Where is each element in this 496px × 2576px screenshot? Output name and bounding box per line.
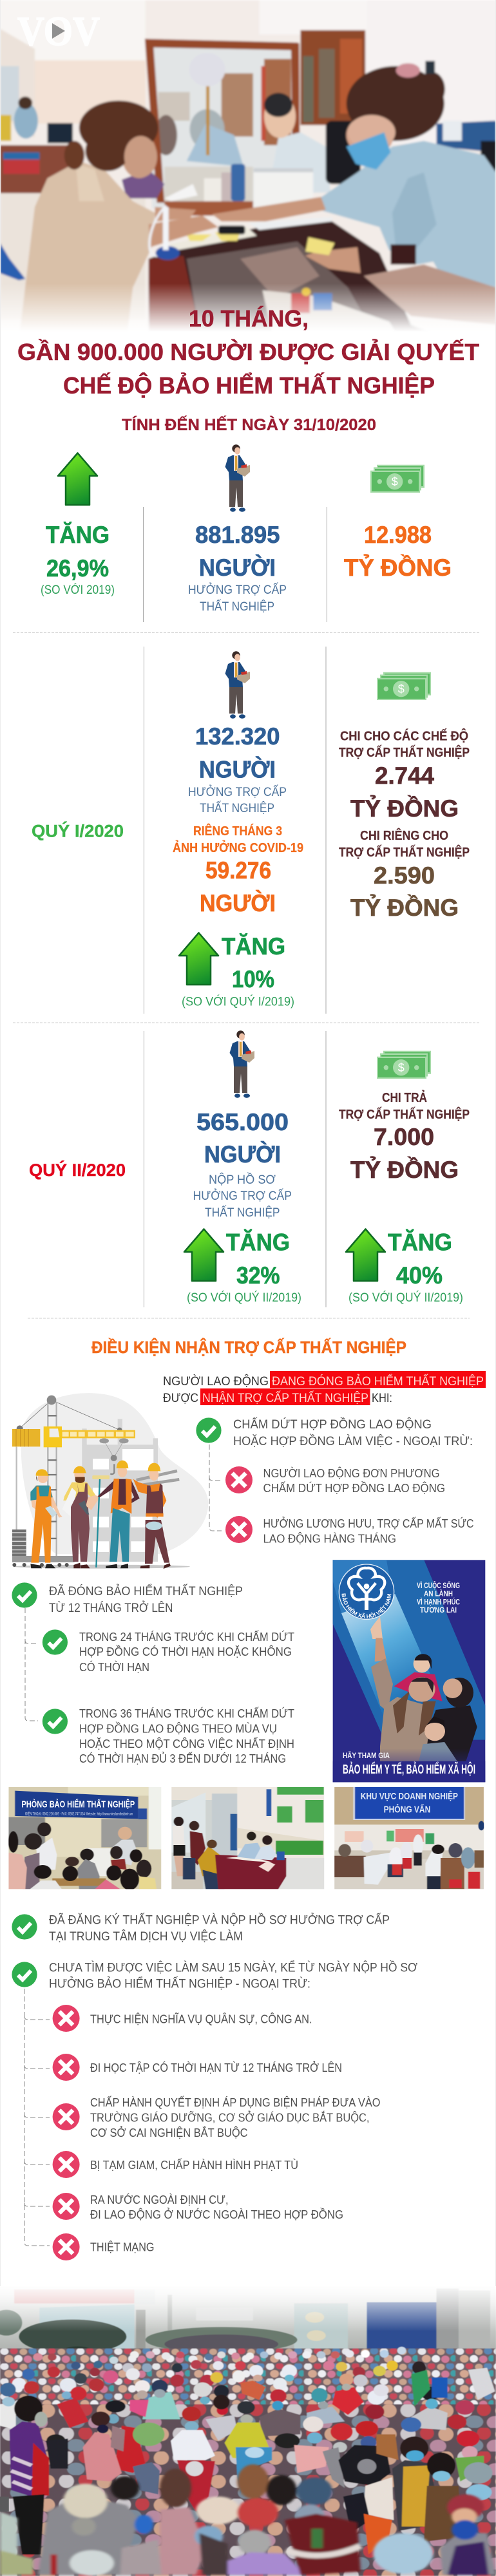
sub condition: 24 months: TRONG 24 THÁNG TRƯỚC KHI CHẤM DỨT xyxy=(79,1630,294,1643)
stat: increase 40 percent: (SO VỚI QUÝ II/2019) xyxy=(348,1290,463,1305)
poster slogan text: AN LÀNH xyxy=(424,1588,453,1598)
photo row: employment service centres xyxy=(8,1787,484,1890)
stat: increase 26.9 percent: 26,9% xyxy=(46,555,109,582)
crowd base texture xyxy=(0,2349,496,2407)
stat: March COVID-19 59.276 people: ẢNH HƯỞNG COVID-19 xyxy=(173,840,303,855)
condition: registered unemployment: ĐÃ ĐĂNG KÝ THẤT NGHIỆP VÀ NỘP HỒ SƠ HƯỞNG TRỢ CẤP xyxy=(49,1911,390,1927)
stat: increase 32 percent: 32% xyxy=(236,1262,280,1289)
exception: reform school or rehab xyxy=(53,2096,380,2139)
stat: 7.000 billion VND xyxy=(339,1090,470,1183)
condition: no job after 15 days xyxy=(12,1959,417,1991)
pen on string xyxy=(149,205,173,256)
far riders xyxy=(33,2347,426,2377)
exception: emigration: ĐI LAO ĐỘNG Ở NƯỚC NGOÀI THEO HỢP ĐỒNG xyxy=(90,2208,343,2221)
connector: exceptions list xyxy=(24,1989,50,2246)
icon: up arrow xyxy=(346,1229,385,1281)
stat: 2.744 billion VND: TRỢ CẤP THẤT NGHIỆP xyxy=(339,744,470,760)
sub condition: 36 months: HỢP ĐỒNG LAO ĐỘNG THEO MÙA VỤ xyxy=(79,1722,277,1735)
stat: increase 26.9 percent xyxy=(41,522,115,597)
exception: unilateral termination: CHẤM DỨT HỢP ĐỒNG LAO ĐỘNG xyxy=(263,1481,445,1495)
poster slogan text: HÃY THAM GIA xyxy=(343,1750,390,1760)
stat: increase 32 percent: TĂNG xyxy=(226,1229,290,1256)
exception: unilateral termination xyxy=(225,1466,445,1495)
label: quarter II: QUÝ II/2020 xyxy=(29,1160,126,1180)
stat: 565.000 people xyxy=(193,1109,292,1220)
exception: reform school or rehab: CHẤP HÀNH QUYẾT ĐỊNH ÁP DỤNG BIỆN PHÁP ĐƯA VÀO xyxy=(90,2096,380,2109)
condition: no job after 15 days: HƯỞNG BẢO HIỂM THẤT NGHIỆP - NGOẠI TRỪ: xyxy=(49,1976,310,1991)
poster: social insurance: BẢO HIỂM XÃ HỘI VIỆT NAM xyxy=(341,1593,392,1618)
exception: detention xyxy=(53,2151,298,2178)
exception: detention: BỊ TẠM GIAM, CHẤP HÀNH HÌNH PHẠT TÙ xyxy=(90,2158,298,2172)
photo top fade xyxy=(0,2283,496,2331)
intro text with red highlights: ĐANG ĐÓNG BẢO HIỂM THẤT NGHIỆP xyxy=(272,1374,484,1388)
stat: 565.000 people: 565.000 xyxy=(196,1109,289,1135)
stat: 2.590 billion VND: TỶ ĐỒNG xyxy=(350,894,459,921)
man behind glass xyxy=(272,132,330,193)
exception: pension xyxy=(225,1516,474,1546)
stat: 881.895 people xyxy=(188,522,287,614)
sub condition: 24 months xyxy=(43,1629,294,1674)
intro text with red highlights: ĐƯỢC xyxy=(163,1391,198,1405)
blurred foreground people xyxy=(0,2465,496,2576)
exception: emigration xyxy=(53,2193,343,2221)
stat: increase 32 percent xyxy=(187,1229,301,1305)
sub condition: 24 months: HỢP ĐỒNG CÓ THỜI HẠN HOẶC KHÔNG xyxy=(79,1645,292,1658)
connector: second condition xyxy=(25,1608,38,1721)
icon: up arrow xyxy=(179,933,218,985)
stat: 132.320 people xyxy=(188,723,287,815)
stat: 2.744 billion VND: CHI CHO CÁC CHẾ ĐỘ xyxy=(340,728,468,743)
icon: worker with box xyxy=(225,444,250,512)
exception: study xyxy=(53,2054,342,2081)
exception: military service: THỰC HIỆN NGHĨA VỤ QUÂN SỰ, CÔNG AN. xyxy=(90,2012,312,2026)
icon: up arrow xyxy=(184,1229,224,1281)
exception: death xyxy=(53,2233,154,2260)
photo 2: service desk xyxy=(171,1787,325,1889)
exception: reform school or rehab: CƠ SỞ CAI NGHIỆN BẮT BUỘC xyxy=(90,2126,247,2139)
condition: paid 12 months: ĐÃ ĐÓNG BẢO HIỂM THẤT NGHIỆP xyxy=(49,1583,243,1598)
sub condition: 36 months: TRONG 36 THÁNG TRƯỚC KHI CHẤM DỨT xyxy=(79,1707,294,1720)
sub condition: 36 months: HOẶC THEO MỘT CÔNG VIỆC NHẤT ĐỊNH xyxy=(79,1737,294,1750)
condition: contract terminated: CHẤM DỨT HỢP ĐỒNG LAO ĐỘNG xyxy=(233,1416,432,1432)
poster slogan text: TƯƠNG LAI xyxy=(420,1605,457,1615)
exception: military service xyxy=(53,2005,312,2032)
sub condition: 24 months: CÓ THỜI HẠN xyxy=(79,1660,149,1674)
illustration: construction workers xyxy=(12,1393,208,1569)
poster slogan text xyxy=(343,1580,475,1777)
title: 10 THÁNG, xyxy=(189,305,309,332)
intro text with red highlights: KHI: xyxy=(372,1391,392,1405)
subtitle: date: TÍNH ĐẾN HẾT NGÀY 31/10/2020 xyxy=(122,415,376,434)
connector: first condition xyxy=(209,1444,222,1531)
condition: registered unemployment xyxy=(12,1911,390,1944)
photo 1: insurance office xyxy=(8,1787,161,1890)
photo 3: interview area: PHỎNG VẤN xyxy=(384,1804,430,1815)
header photo: unemployment insurance counter xyxy=(0,0,496,444)
right woman xyxy=(320,141,496,287)
condition: no job after 15 days: CHƯA TÌM ĐƯỢC VIỆC LÀM SAU 15 NGÀY, KỂ TỪ NGÀY NỘP HỒ SƠ xyxy=(49,1959,417,1975)
stat: 881.895 people: HƯỞNG TRỢ CẤP xyxy=(188,582,287,597)
left woman xyxy=(19,161,155,339)
worker 1 xyxy=(30,1469,62,1568)
stat: 881.895 people: THẤT NGHIỆP xyxy=(200,599,274,614)
calendar and desk items xyxy=(254,168,313,209)
stat: 132.320 people: HƯỞNG TRỢ CẤP xyxy=(188,784,287,799)
stat: increase 26.9 percent: (SO VỚI 2019) xyxy=(41,582,115,597)
stat: 12.988 billion VND xyxy=(344,522,452,581)
condition: contract terminated xyxy=(196,1416,473,1448)
panel: quarter I 2020 xyxy=(32,647,470,1014)
stat: 7.000 billion VND: CHI TRẢ xyxy=(382,1090,427,1105)
icon: up arrow xyxy=(58,453,97,505)
label: quarter I: QUÝ I/2020 xyxy=(32,820,124,841)
heading: conditions: ĐIỀU KIỆN NHẬN TRỢ CẤP THẤT NGHIỆP xyxy=(91,1338,406,1357)
photo 1: insurance office: PHÒNG BẢO HIỂM THẤT NGHIỆP xyxy=(21,1799,135,1810)
wooden frame xyxy=(145,39,298,50)
stat: increase 26.9 percent: TĂNG xyxy=(46,522,110,548)
stat: increase 40 percent: 40% xyxy=(396,1262,443,1289)
title: CHẾ ĐỘ BẢO HIỂM THẤT NGHIỆP xyxy=(63,372,435,399)
photo 3: interview area xyxy=(334,1787,484,1889)
stat: increase 10 percent: 10% xyxy=(232,966,274,992)
stat: 2.590 billion VND: TRỢ CẤP THẤT NGHIỆP xyxy=(339,844,470,860)
poster slogan text: VÌ CUỘC SỐNG xyxy=(417,1580,460,1590)
stat: 7.000 billion VND: TRỢ CẤP THẤT NGHIỆP xyxy=(339,1106,470,1122)
title: GẦN 900.000 NGƯỜI ĐƯỢC GIẢI QUYẾT xyxy=(17,338,479,365)
stat: 2.590 billion VND: 2.590 xyxy=(374,862,435,889)
worker 4 with pipes xyxy=(133,1463,179,1569)
stat: 881.895 people: 881.895 xyxy=(195,522,280,548)
stat: 2.744 billion VND: 2.744 xyxy=(375,762,434,789)
exception: death: THIỆT MẠNG xyxy=(90,2240,155,2254)
poster: social insurance xyxy=(332,1560,486,1783)
sub condition: 36 months: CÓ THỜI HẠN ĐỦ 3 ĐẾN DƯỚI 12 THÁNG xyxy=(79,1752,286,1765)
icon: money xyxy=(377,672,431,700)
stat: increase 40 percent xyxy=(348,1229,463,1305)
stat: 7.000 billion VND: 7.000 xyxy=(374,1124,434,1150)
logo: VOV: VOV xyxy=(17,8,100,55)
poster slogan text: VÌ HẠNH PHÚC xyxy=(417,1597,460,1606)
condition: paid 12 months xyxy=(12,1582,243,1615)
stat: March COVID-19 59.276 people: RIÊNG THÁNG 3 xyxy=(193,823,282,838)
middle riders xyxy=(0,2365,495,2441)
stat: March COVID-19 59.276 people: 59.276 xyxy=(205,857,271,884)
stat: 565.000 people: NGƯỜI xyxy=(204,1141,281,1168)
condition: registered unemployment: TẠI TRUNG TÂM DỊCH VỤ VIỆC LÀM xyxy=(49,1929,243,1944)
panel: quarter II 2020 xyxy=(29,1030,470,1307)
icon: worker with box xyxy=(225,651,250,719)
icon: worker with box xyxy=(229,1030,254,1098)
stat: 132.320 people: NGƯỜI xyxy=(199,756,276,783)
chair and blue pillow right xyxy=(326,120,361,184)
exception: study: ĐI HỌC TẬP CÓ THỜI HẠN TỪ 12 THÁNG TRỞ LÊN xyxy=(90,2061,342,2074)
stat: 565.000 people: NỘP HỒ SƠ xyxy=(209,1171,276,1187)
stat: increase 10 percent xyxy=(182,933,294,1009)
exception: reform school or rehab: TRƯỜNG GIÁO DƯỠNG, CƠ SỞ GIÁO DỤC BẮT BUỘC, xyxy=(90,2111,370,2124)
sub condition: 36 months xyxy=(43,1707,294,1765)
condition: contract terminated: HOẶC HỢP ĐỒNG LÀM VIỆC - NGOẠI TRỪ: xyxy=(233,1433,473,1448)
exception: unilateral termination: NGƯỜI LAO ĐỘNG ĐƠN PHƯƠNG xyxy=(263,1466,439,1480)
stat: 565.000 people: THẤT NGHIỆP xyxy=(205,1205,280,1220)
stat: increase 32 percent: (SO VỚI QUÝ II/2019) xyxy=(187,1290,301,1305)
exception: emigration: RA NƯỚC NGOÀI ĐỊNH CƯ, xyxy=(90,2193,228,2206)
stat: 565.000 people: HƯỞNG TRỢ CẤP xyxy=(193,1188,292,1203)
exception: pension: LAO ĐỘNG HÀNG THÁNG xyxy=(263,1531,396,1546)
stat: March COVID-19 59.276 people: NGƯỜI xyxy=(200,889,276,916)
stat: 7.000 billion VND: TỶ ĐỒNG xyxy=(350,1156,459,1183)
icon: money xyxy=(377,1051,431,1079)
icon: money xyxy=(370,465,424,493)
panel: whole ten months xyxy=(41,444,452,622)
intro text with red highlights xyxy=(163,1371,486,1405)
stat: 12.988 billion VND: 12.988 xyxy=(364,522,432,548)
stat: 881.895 people: NGƯỜI xyxy=(199,554,276,581)
title xyxy=(17,305,479,399)
stat: increase 10 percent: (SO VỚI QUÝ I/2019) xyxy=(182,994,294,1009)
stat: 2.744 billion VND: TỶ ĐỒNG xyxy=(350,795,459,822)
stat: March COVID-19 59.276 people xyxy=(173,823,303,916)
stat: 2.744 billion VND xyxy=(339,728,470,822)
photo fade to white xyxy=(0,283,496,332)
stat: 132.320 people: 132.320 xyxy=(195,723,280,750)
stat: increase 40 percent: TĂNG xyxy=(388,1229,452,1256)
photo 1: insurance office: ĐIỆN THOẠI: 0562.226.089 - FAX: 0562.747.034 Website: http://www.vieclamthaibinh.vn xyxy=(25,1812,133,1816)
partition glass xyxy=(152,48,292,209)
desk glass top xyxy=(149,222,496,359)
stat: 132.320 people: THẤT NGHIỆP xyxy=(200,800,274,815)
worker 2 xyxy=(62,1466,100,1568)
stat: increase 10 percent: TĂNG xyxy=(222,933,285,960)
bottom photo: crowd of workers on motorbikes xyxy=(0,2283,496,2576)
worker 3 with paint roller xyxy=(92,1461,140,1568)
intro text with red highlights: NGƯỜI LAO ĐỘNG xyxy=(163,1374,269,1388)
papers xyxy=(169,227,257,250)
stat: 2.590 billion VND: CHI RIÊNG CHO xyxy=(360,828,448,843)
near riders xyxy=(10,2395,492,2555)
intro text with red highlights: NHẬN TRỢ CẤP THẤT NGHIỆP xyxy=(202,1390,368,1405)
balloon and ornaments xyxy=(189,53,225,86)
stat: 2.590 billion VND xyxy=(339,828,470,921)
stat: 12.988 billion VND: TỶ ĐỒNG xyxy=(344,554,452,581)
condition: paid 12 months: TỪ 12 THÁNG TRỞ LÊN xyxy=(49,1600,173,1615)
